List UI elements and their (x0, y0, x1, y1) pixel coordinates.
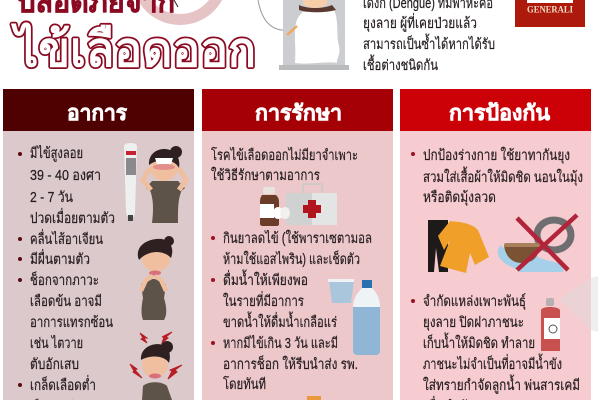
icon: medicine bottle and first aid kit (260, 184, 337, 226)
text block: prevention list: ยุงลาย ปิดฝาภาชนะ (423, 315, 524, 331)
text block: prevention list: จำกัดแหล่งเพาะพันธุ์ (423, 293, 526, 310)
logo: Generali (515, 0, 585, 27)
icon: insect spray can (541, 298, 560, 351)
text block: symptoms list: เลือดข้น อาจมี (30, 293, 102, 310)
illustration: patient with drip (258, 0, 349, 70)
text block: prevention list: ปกป้องร่างกาย ใช้ยาทากันยุง (423, 146, 570, 164)
text block: symptoms list: มีไข้สูงลอย (30, 144, 83, 162)
panel: symptoms (3, 89, 194, 400)
text block: symptoms list: ช็อกจากภาวะ (30, 270, 99, 289)
icon: ring behind title (138, 0, 222, 20)
text block: symptoms list (18, 144, 115, 400)
illustration: woman in shock (130, 332, 182, 400)
text block: treatment list (211, 146, 372, 393)
heading: symptoms (3, 89, 194, 131)
illustration: bowl, tyre and cross (498, 215, 577, 272)
text block: treatment list: อาการช็อก ให้รีบนำส่ง รพ. (223, 354, 358, 373)
text block: prevention list: หรือติดมุ้งลวด (423, 189, 496, 206)
illustration: nauseous woman (138, 236, 174, 320)
text block: treatment list: ดื่มน้ำให้เพียงพอ (223, 269, 308, 289)
text block: prevention list (411, 146, 583, 400)
text block: prevention list: ภาชนะไม่จำเป็นที่อาจมีน้ำขัง (423, 353, 562, 373)
text block: symptoms list: มีผื่นตามตัว (30, 249, 90, 268)
heading: treatment (202, 89, 393, 131)
panel: prevention (400, 89, 591, 400)
text block: symptoms list: ตับอักเสบ (30, 357, 79, 373)
icon: pill pack (307, 396, 321, 400)
logo: Generali: GENERALI (527, 6, 573, 16)
text block: treatment list: กินยาลดไข้ (ใช้พาราเซตามอล (223, 229, 372, 247)
text block: treatment list: ขาดน้ำให้ดื่มน้ำเกลือแร่ (223, 311, 337, 331)
text block: treatment list: ใช้วิธีรักษาตามอาการ (211, 166, 320, 184)
icon: insect spray cone (559, 278, 591, 330)
text block: treatment list: โดยทันที (223, 375, 266, 393)
text block: treatment list: หากมีไข้เกิน 3 วัน และมี (223, 334, 338, 352)
text block: treatment list: โรคไข้เลือดออกไม่มียาจำเพาะ (211, 146, 358, 164)
text block: symptoms list: เช่น ไตวาย (30, 334, 83, 352)
text block: intro: ยุงลาย ผู้ที่เคยป่วยแล้ว (363, 13, 477, 32)
text block: intro: สามารถเป็นซ้ำได้หากได้รับ (363, 33, 495, 53)
heading: symptoms: อาการ (67, 102, 128, 125)
heading: treatment: การรักษา (255, 102, 342, 125)
text block: treatment list: ในรายที่มีอาการ (223, 291, 304, 310)
icon: water glass and bottle (328, 279, 380, 355)
heading: prevention (400, 89, 591, 131)
text block: symptoms list: 2 - 7 วัน (30, 190, 73, 206)
text block: symptoms list: อาการแทรกซ้อน (30, 314, 113, 331)
text block: symptoms list: คลื่นไส้อาเจียน (30, 229, 103, 248)
text block: symptoms list: ปวดเมื่อยตามตัว (30, 208, 115, 227)
panel: treatment (202, 89, 393, 400)
heading: prevention: การป้องกัน (449, 101, 551, 125)
illustration: woman with headache (143, 146, 186, 223)
icon: thermometer (124, 143, 137, 221)
text block: symptoms list: เกล็ดเลือดต่ำ (30, 375, 96, 394)
text block: prevention list: เก็บน้ำให้มิดชิด ทำลาย (423, 332, 535, 352)
text block: intro (363, 0, 495, 74)
text block: intro: เชื้อต่างชนิดกัน (363, 54, 438, 74)
icon: spray cone outside panel (591, 276, 598, 332)
text block: treatment list: ห้ามใช้แอสไพริน) และเช็ดตัว (223, 249, 360, 268)
title: main line: ไข้เลือดออก (10, 21, 256, 77)
text block: symptoms list: 39 - 40 องศา (30, 168, 101, 184)
illustration: long clothing (428, 220, 489, 273)
